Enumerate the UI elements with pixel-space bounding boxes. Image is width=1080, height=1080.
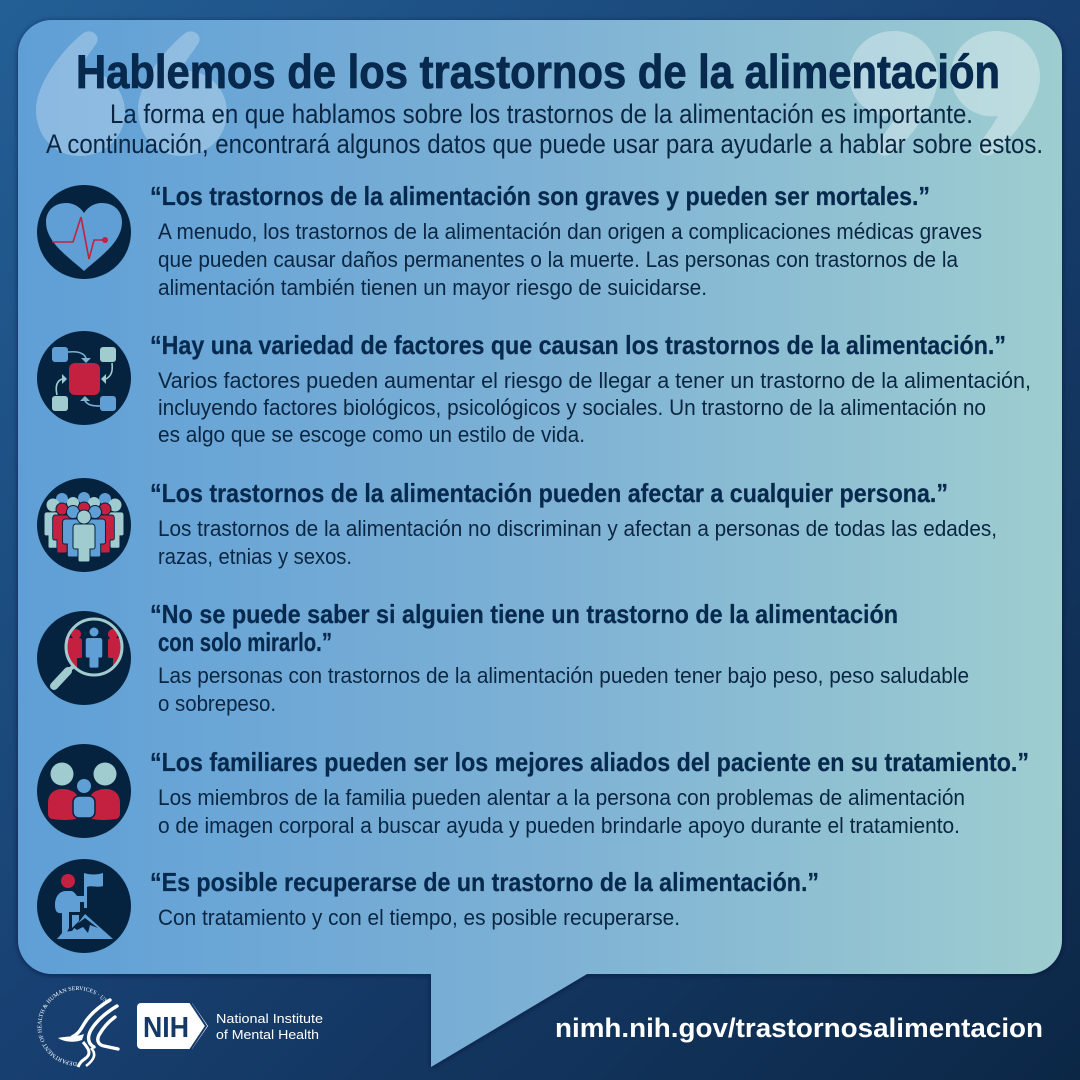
item 2 text (150, 330, 1031, 447)
item 3 text (150, 478, 997, 569)
item 4 text: con solo mirarlo.” (158, 627, 332, 657)
item 6 text: Con tratamiento y con el tiempo, es posible recuperarse. (158, 905, 680, 930)
HHS seal logo (38, 986, 120, 1068)
item 6 text (150, 867, 819, 930)
National Institute of Mental Health (216, 1011, 323, 1042)
item 1 text: alimentación también tienen un mayor riesgo de suicidarse. (158, 275, 707, 300)
closing quotation marks (849, 31, 1040, 156)
item 1 text (150, 181, 982, 300)
National Institute of Mental Health: of Mental Health (216, 1027, 319, 1042)
icon: heart with pulse (37, 185, 131, 279)
item 2 text: Varios factores pueden aumentar el riesgo de llegar a tener un trastorno de la alimentación, (158, 368, 1031, 393)
item 2 text: es algo que se escoge como un estilo de vida. (158, 422, 585, 447)
opening quotation marks (36, 31, 227, 156)
item 4 text (150, 599, 969, 716)
website URL: nimh.nih.gov/trastornosalimentacion (555, 1013, 1043, 1043)
NIH logo: NIH (143, 1012, 189, 1044)
icon: connected factors (37, 331, 131, 425)
item 4 text: “No se puede saber si alguien tiene un trastorno de la alimentación (150, 599, 898, 629)
icon: person reaching summit with flag (37, 859, 131, 953)
item 2 text: “Hay una variedad de factores que causan los trastornos de la alimentación.” (150, 330, 1006, 360)
icon: family (37, 744, 131, 838)
item 5 text: Los miembros de la familia pueden alentar a la persona con problemas de alimentación (158, 785, 965, 810)
icon: magnifying glass over people (37, 611, 131, 705)
item 5 text (150, 747, 1029, 838)
item 1 text: que pueden causar daños permanentes o la muerte. Las personas con trastornos de la (158, 247, 958, 272)
NIH logo (137, 1002, 208, 1050)
HHS seal logo: DEPARTMENT OF HEALTH & HUMAN SERVICES · USA (38, 986, 108, 1066)
item 1 text: “Los trastornos de la alimentación son graves y pueden ser mortales.” (150, 181, 930, 211)
item 2 text: incluyendo factores biológicos, psicológicos y sociales. Un trastorno de la alimentación no (158, 395, 986, 420)
item 6 text: “Es posible recuperarse de un trastorno de la alimentación.” (150, 867, 819, 897)
item 3 text: Los trastornos de la alimentación no discriminan y afectan a personas de todas las edades, (158, 516, 997, 541)
item 1 text: A menudo, los trastornos de la alimentación dan origen a complicaciones médicas graves (158, 219, 982, 244)
item 3 text: razas, etnias y sexos. (158, 544, 352, 569)
item 5 text: o de imagen corporal a buscar ayuda y pueden brindarle apoyo durante el tratamiento. (158, 813, 960, 838)
subtitle (46, 99, 1043, 159)
National Institute of Mental Health: National Institute (216, 1011, 323, 1026)
subtitle: La forma en que hablamos sobre los trastornos de la alimentación es importante. (110, 99, 973, 129)
item 3 text: “Los trastornos de la alimentación pueden afectar a cualquier persona.” (150, 478, 948, 508)
item 4 text: o sobrepeso. (158, 691, 276, 716)
item 4 text: Las personas con trastornos de la alimentación pueden tener bajo peso, peso saludable (158, 663, 969, 688)
icon: crowd of people (37, 478, 131, 572)
